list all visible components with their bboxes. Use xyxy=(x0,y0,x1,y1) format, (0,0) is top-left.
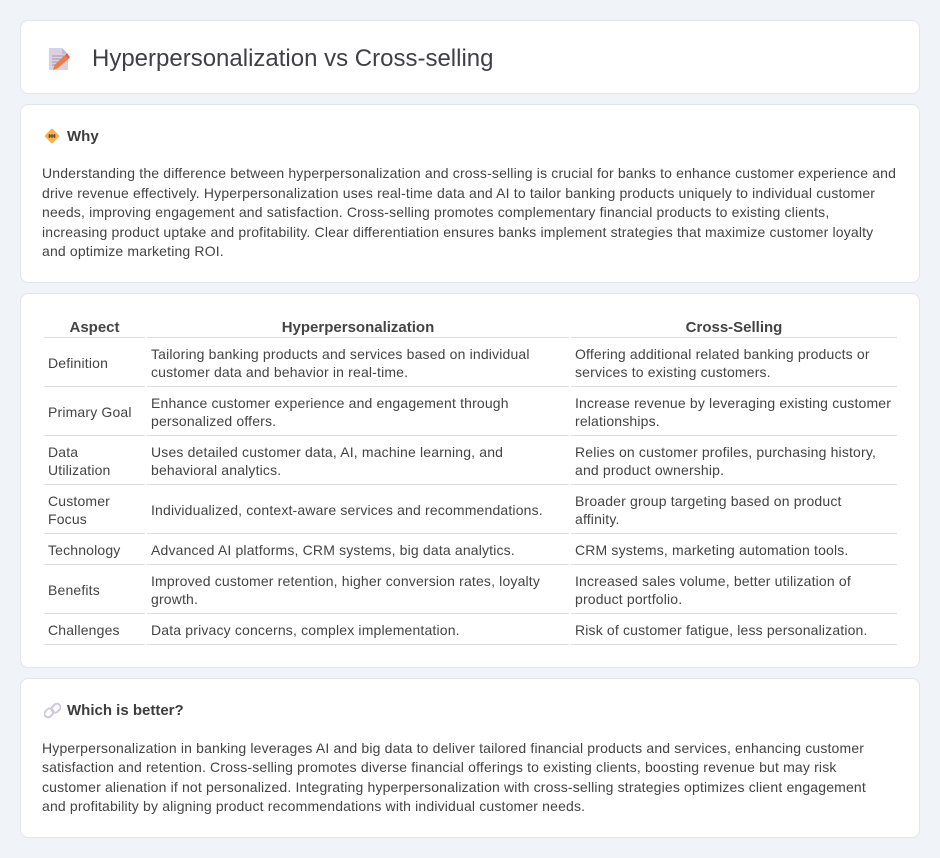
icon: chain link xyxy=(44,702,61,718)
text block: why: and optimize marketing ROI. xyxy=(42,243,224,259)
row: data utilization label: Data xyxy=(48,444,78,460)
row: customer focus cross-selling: affinity. xyxy=(575,511,620,527)
row: benefits label: Benefits xyxy=(48,582,100,598)
row: customer focus hyperpersonalization: Individualized, context-aware services and recommendations. xyxy=(151,502,543,518)
text block: which is better: customer alienation if not personalized. Integrating hyperpersonalization with cross-selling strategies optimizes client engagement xyxy=(42,778,866,794)
panel: title card xyxy=(20,20,920,94)
row: primary goal cross-selling xyxy=(575,395,891,429)
row: customer focus label: Customer xyxy=(48,493,110,509)
row: data utilization hyperpersonalization: Uses detailed customer data, AI, machine learning, and xyxy=(151,444,503,460)
text block: why xyxy=(42,165,896,259)
text block: why: increasing product uptake and profitability. Clear differentiation ensures banks implement strategies that maximize customer loyalty xyxy=(42,224,873,240)
row: technology cross-selling: CRM systems, marketing automation tools. xyxy=(575,542,848,558)
table header: aspect: Aspect xyxy=(69,319,120,336)
text block: why: needs, improving engagement and satisfaction. Cross-selling promotes complementary financial products to existing clients, xyxy=(42,204,829,220)
row: definition cross-selling: services to existing customers. xyxy=(575,364,771,380)
row: customer focus cross-selling: Broader group targeting based on product xyxy=(575,493,842,509)
text block: which is better xyxy=(42,740,866,814)
title: Hyperpersonalization vs Cross-selling xyxy=(92,45,494,72)
row: data utilization cross-selling: and product ownership. xyxy=(575,462,724,478)
row: data utilization cross-selling: Relies on customer profiles, purchasing history, xyxy=(575,444,876,460)
row: challenges label: Challenges xyxy=(48,622,120,638)
row: challenges cross-selling: Risk of customer fatigue, less personalization. xyxy=(575,622,868,638)
row: customer focus label: Focus xyxy=(48,511,87,527)
icon: warning diamond xyxy=(44,128,60,144)
panel: why xyxy=(20,104,920,283)
panel: comparison table xyxy=(20,293,920,668)
row: definition cross-selling xyxy=(575,346,870,380)
row: primary goal label: Primary Goal xyxy=(48,404,132,420)
table header: cross-selling xyxy=(571,316,897,338)
text block: which is better: Hyperpersonalization in banking leverages AI and big data to deliver tailored financial products and services, enhancing customer xyxy=(42,740,864,756)
row: primary goal cross-selling: relationships. xyxy=(575,413,660,429)
row: data utilization label: Utilization xyxy=(48,462,111,478)
heading: why: Why xyxy=(67,128,99,145)
row: customer focus label xyxy=(48,493,110,527)
text block: why: Understanding the difference between hyperpersonalization and cross-selling is crucial for banks to enhance customer experience and xyxy=(42,165,896,181)
table header: hyperpersonalization xyxy=(147,316,569,338)
row: benefits hyperpersonalization xyxy=(151,573,540,607)
row: benefits hyperpersonalization: growth. xyxy=(151,591,198,607)
row: technology hyperpersonalization: Advanced AI platforms, CRM systems, big data analytics. xyxy=(151,542,515,558)
row: customer focus cross-selling xyxy=(575,493,842,527)
row: definition cross-selling: Offering additional related banking products or xyxy=(575,346,870,362)
table header: hyperpersonalization: Hyperpersonalization xyxy=(282,319,434,336)
panel: which is better xyxy=(20,678,920,838)
table header: aspect xyxy=(44,316,145,338)
row: data utilization hyperpersonalization xyxy=(151,444,503,478)
icon: document with pencil xyxy=(49,48,70,70)
text block: why: drive revenue effectively. Hyperpersonalization uses real-time data and AI to tailor banking products uniquely to individual customer xyxy=(42,184,875,200)
row: benefits hyperpersonalization: Improved customer retention, higher conversion rates, loyalty xyxy=(151,573,540,589)
text block: which is better: and profitability by aligning product recommendations with individual customer needs. xyxy=(42,798,585,814)
row: primary goal cross-selling: Increase revenue by leveraging existing customer xyxy=(575,395,891,411)
row: definition hyperpersonalization: customer data and behavior in real-time. xyxy=(151,364,408,380)
row: primary goal hyperpersonalization: personalized offers. xyxy=(151,413,276,429)
row: data utilization cross-selling xyxy=(575,444,876,478)
row: data utilization hyperpersonalization: behavioral analytics. xyxy=(151,462,281,478)
row: primary goal hyperpersonalization: Enhance customer experience and engagement through xyxy=(151,395,509,411)
row: definition hyperpersonalization: Tailoring banking products and services based on individual xyxy=(151,346,530,362)
table header: cross-selling: Cross-Selling xyxy=(686,319,782,336)
row: challenges hyperpersonalization: Data privacy concerns, complex implementation. xyxy=(151,622,460,638)
row: primary goal hyperpersonalization xyxy=(151,395,509,429)
row: benefits cross-selling: product portfolio. xyxy=(575,591,682,607)
row: definition label: Definition xyxy=(48,355,108,371)
heading: which is better: Which is better? xyxy=(67,702,184,719)
row: technology label: Technology xyxy=(48,542,120,558)
row: benefits cross-selling: Increased sales volume, better utilization of xyxy=(575,573,851,589)
row: data utilization label xyxy=(48,444,111,478)
text block: which is better: satisfaction and retention. Cross-selling promotes diverse financial offerings to existing clients, boosting revenue but may risk xyxy=(42,759,837,775)
row: definition hyperpersonalization xyxy=(151,346,530,380)
row: benefits cross-selling xyxy=(575,573,851,607)
